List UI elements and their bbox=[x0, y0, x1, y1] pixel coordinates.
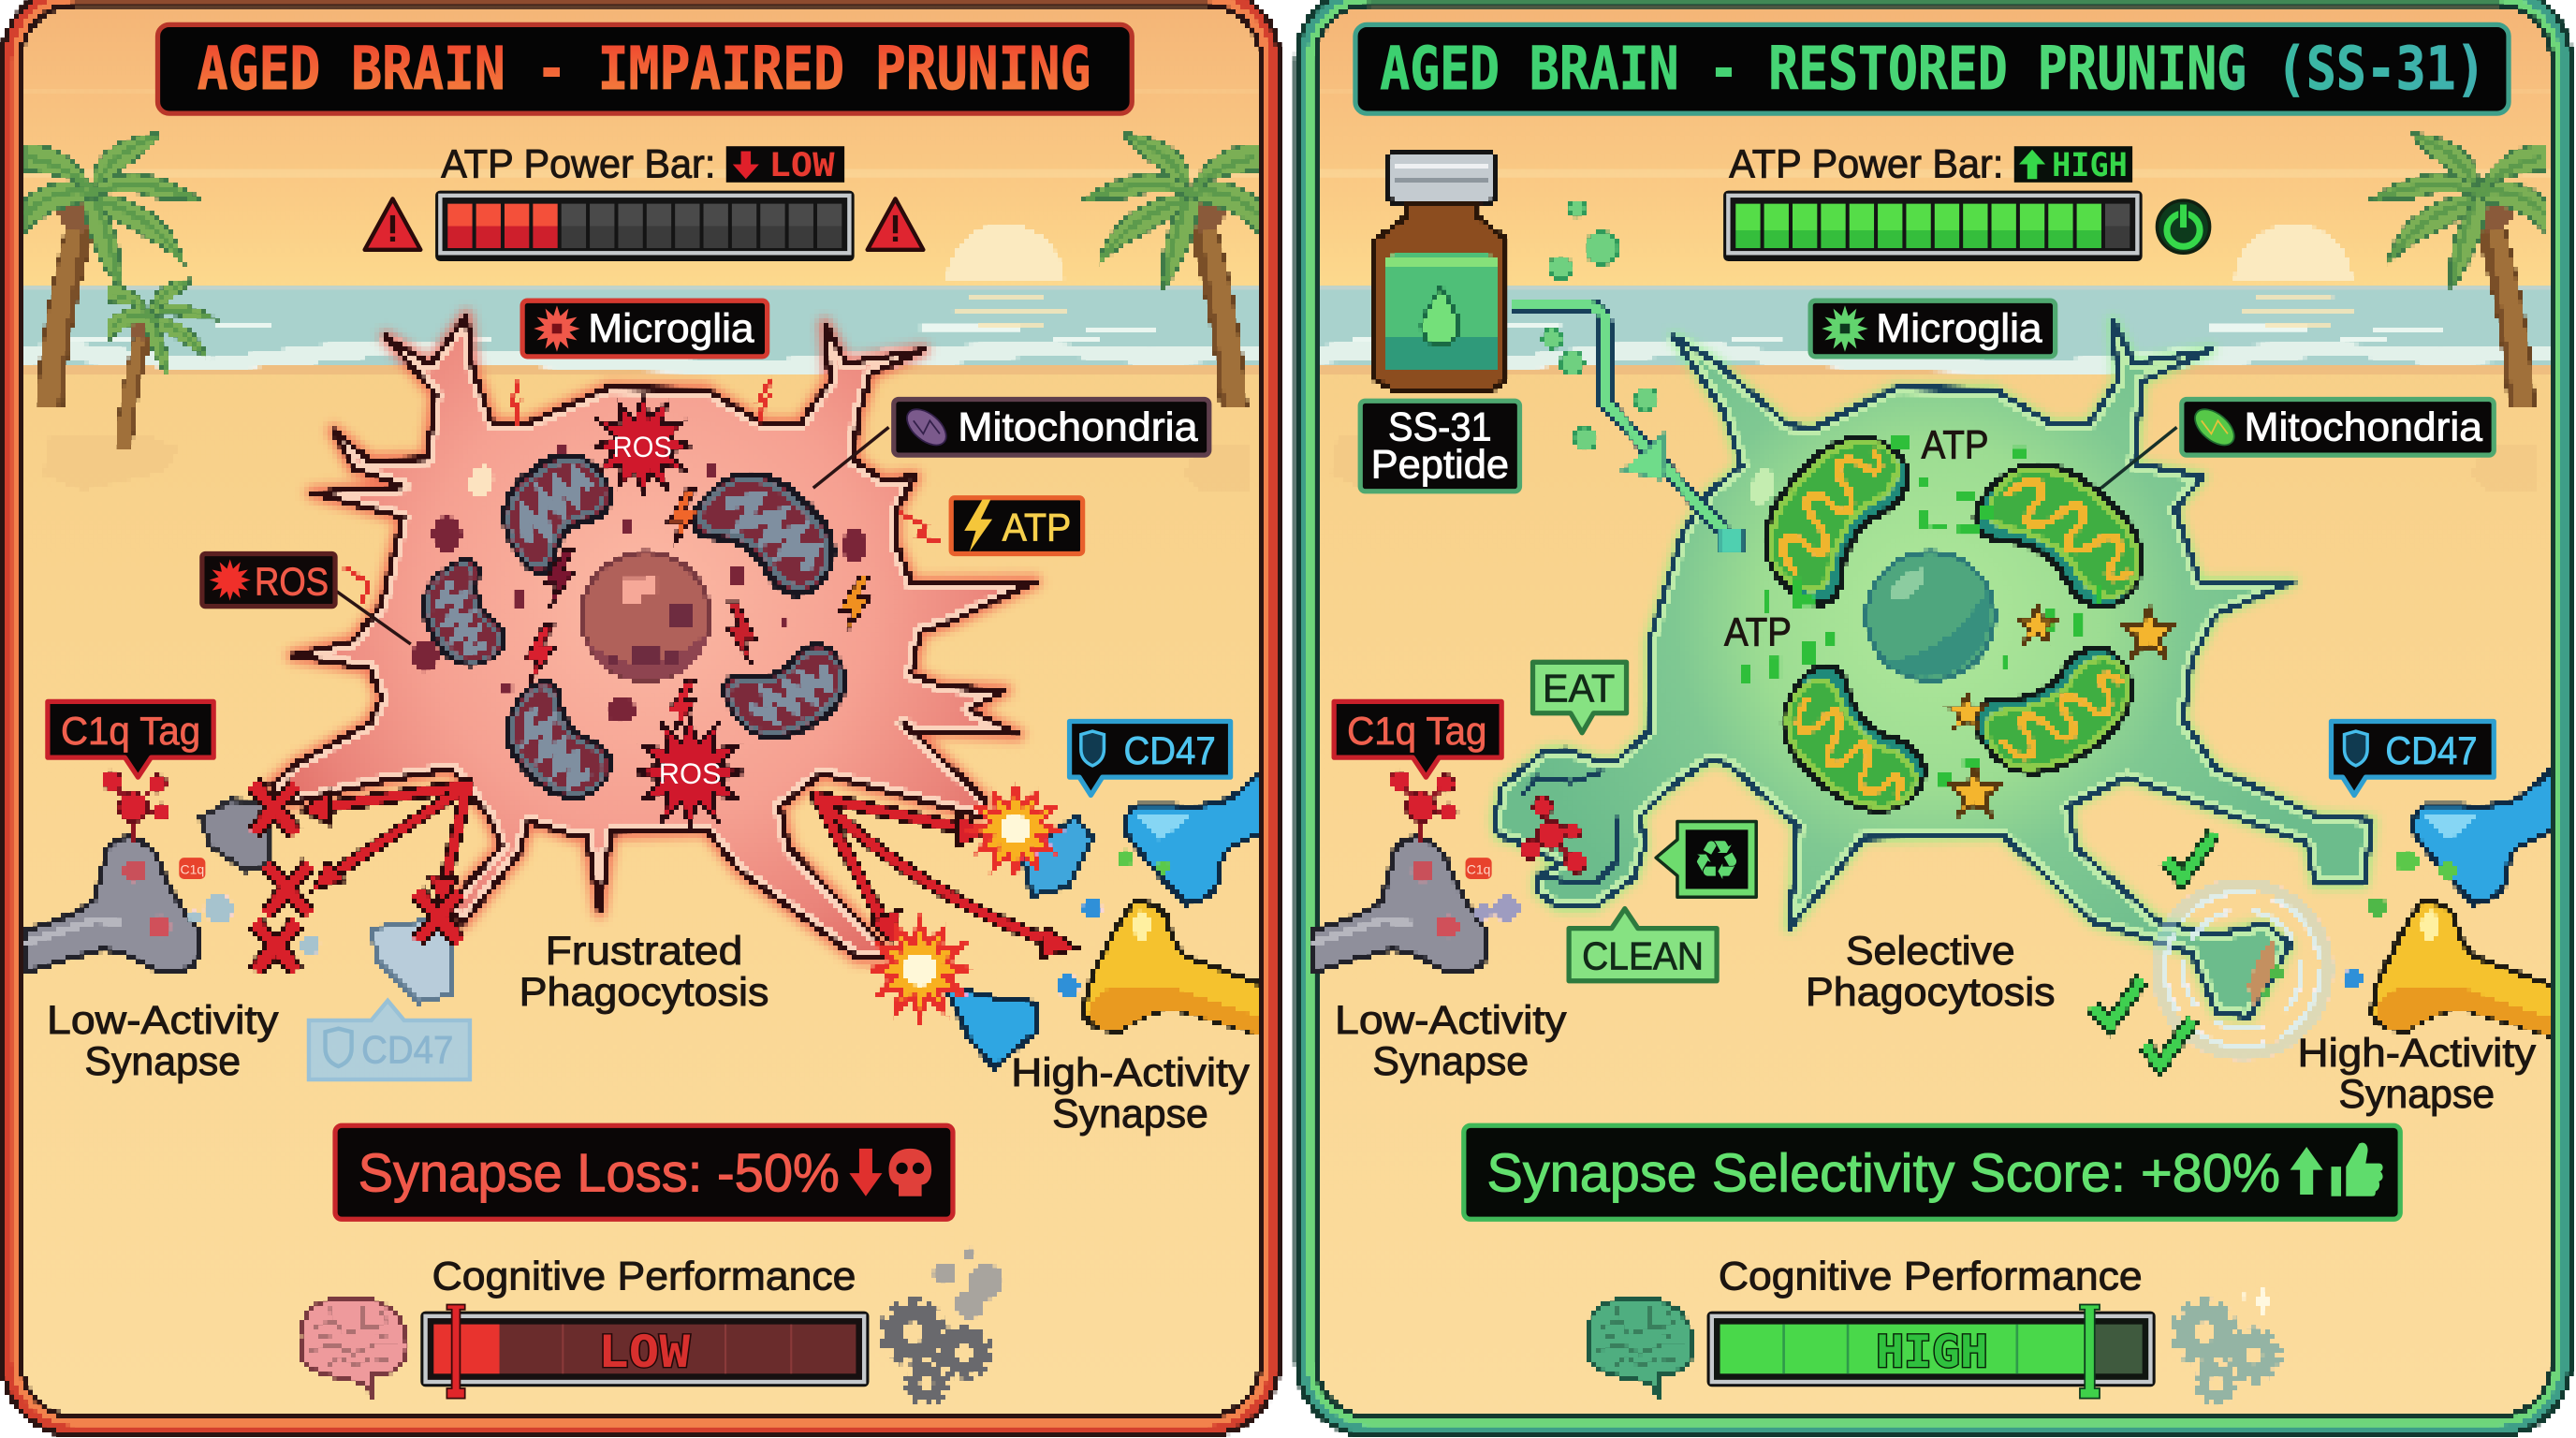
ATP power bar heading: ATP Power Bar: bbox=[441, 142, 715, 187]
icon: brain bbox=[1588, 1299, 1693, 1397]
result: synapse loss: Synapse Loss: -50% bbox=[359, 1143, 840, 1203]
label: mitochondria: Mitochondria bbox=[2244, 404, 2482, 449]
label: microglia bbox=[522, 301, 768, 357]
label layer bbox=[1334, 24, 2537, 1399]
cognitive bar low: LOW bbox=[598, 1327, 691, 1378]
mitochondria healthy bbox=[1735, 414, 2165, 830]
label: C1q tag bbox=[1334, 701, 1501, 777]
title banner bbox=[157, 24, 1132, 113]
ATP power bar bbox=[1723, 191, 2143, 261]
text: selective phagocytosis: Phagocytosis bbox=[1806, 970, 2056, 1015]
ATP power bar heading: HIGH bbox=[2052, 146, 2128, 184]
ROS text bottom: ROS bbox=[659, 756, 721, 790]
check marks bbox=[2093, 833, 2215, 1064]
label: faded CD47 bbox=[309, 1001, 470, 1079]
delivery tube arrow bbox=[1512, 305, 1745, 552]
cognitive bar low bbox=[420, 1305, 869, 1399]
explosion lower bbox=[863, 913, 976, 1026]
ATP particles bbox=[1741, 435, 2103, 788]
bubbles bbox=[1543, 200, 1658, 450]
text: low activity synapse: Low-Activity bbox=[47, 998, 279, 1043]
label: SS-31 peptide: SS-31 bbox=[1388, 404, 1492, 449]
icon: gears with sparkles bbox=[2175, 1286, 2278, 1402]
small damaged organelles bbox=[413, 444, 866, 723]
text: high activity synapse: Synapse bbox=[2338, 1072, 2495, 1117]
text: high activity synapse: Synapse bbox=[1052, 1092, 1208, 1137]
small blue synapse bbox=[944, 986, 1036, 1068]
peptide vial bbox=[1375, 151, 1506, 389]
label: CD47 bbox=[2331, 721, 2494, 795]
label: ROS: ROS bbox=[255, 559, 329, 603]
blue synapse right bbox=[2395, 759, 2561, 903]
title banner: AGED BRAIN - IMPAIRED PRUNING bbox=[198, 34, 1090, 103]
beach background bbox=[0, 0, 1298, 1438]
engulfed C1q molecule bbox=[1521, 797, 1587, 873]
icon: warning right bbox=[868, 198, 923, 250]
label: mitochondria: Mitochondria bbox=[958, 404, 1198, 449]
ROS burst bottom bbox=[636, 718, 744, 827]
icon: recycling: ♻ bbox=[1692, 829, 1741, 892]
label: CD47 bbox=[1070, 721, 1231, 795]
X marks bbox=[253, 784, 460, 971]
icon: gears with smoke bbox=[885, 1247, 1003, 1402]
label: mitochondria bbox=[894, 399, 1209, 455]
small C1q tag bbox=[179, 858, 205, 879]
label: ATP: ATP bbox=[1003, 505, 1071, 549]
text: high activity synapse: High-Activity bbox=[1011, 1050, 1250, 1095]
text: low activity synapse: Low-Activity bbox=[1335, 998, 1567, 1043]
label: microglia: Microglia bbox=[588, 306, 754, 351]
text: frustrated phagocytosis: Phagocytosis bbox=[520, 970, 768, 1015]
lightning bolts bbox=[524, 489, 871, 733]
label: CLEAN: CLEAN bbox=[1582, 934, 1704, 978]
ATP power bar heading: ATP Power Bar: bbox=[1729, 142, 2003, 187]
cognitive bar high: HIGH bbox=[1876, 1327, 1988, 1378]
blue synapse right bbox=[1119, 772, 1259, 908]
label: ROS bbox=[202, 553, 335, 607]
label: EAT bbox=[1533, 662, 1627, 733]
icon: warning left bbox=[365, 198, 420, 250]
icon: palm tree right bbox=[2369, 133, 2546, 407]
broken synapse fragment bbox=[200, 800, 271, 871]
result: selectivity score: Synapse Selectivity Score: +80% bbox=[1486, 1143, 2280, 1203]
yellow synapse right bbox=[2343, 897, 2561, 1038]
ATP power bar heading: LOW bbox=[768, 146, 836, 184]
result: selectivity score bbox=[1464, 1125, 2400, 1219]
text: selective phagocytosis: Selective bbox=[1846, 929, 2015, 974]
label: mitochondria bbox=[2182, 399, 2494, 455]
icon: small palm tree left bbox=[109, 279, 218, 448]
pruning arrows left bbox=[300, 785, 468, 905]
artwork layer: beach, cell and synapses bbox=[1288, 0, 2576, 1438]
label: SS-31 peptide bbox=[1360, 401, 1519, 492]
engulfed synapse detail bbox=[2247, 940, 2284, 1005]
leader line bbox=[2101, 427, 2177, 488]
label: CLEAN bbox=[1569, 909, 1717, 981]
yellow synapse right bbox=[1057, 899, 1273, 1038]
label: microglia bbox=[1810, 301, 2056, 357]
label: C1q tag: C1q Tag bbox=[1347, 709, 1486, 753]
phagocytic cup inner lines bbox=[1521, 770, 1617, 882]
artwork layer: beach, cell and synapses bbox=[0, 0, 1298, 1438]
icon: recycling bbox=[1656, 822, 1756, 897]
nucleus bbox=[581, 552, 710, 681]
label: C1q tag bbox=[48, 701, 213, 777]
low activity synapse bbox=[1312, 770, 1519, 973]
panel frame bbox=[3, 0, 1279, 1435]
broken blue synapse piece bbox=[1022, 816, 1092, 896]
ROS text top: ROS bbox=[613, 430, 672, 463]
panel frame bbox=[1297, 0, 2570, 1435]
label: C1q tag: C1q Tag bbox=[61, 709, 200, 753]
label: CD47: CD47 bbox=[1123, 728, 1216, 772]
microglia cell, impaired bbox=[271, 315, 1035, 958]
text: cognitive performance: Cognitive Performance bbox=[1719, 1255, 2143, 1299]
label: CD47: CD47 bbox=[2385, 728, 2478, 772]
icon: brain bbox=[302, 1299, 407, 1397]
small C1q tag: C1q bbox=[180, 862, 204, 877]
label layer bbox=[47, 24, 1250, 1399]
ROS burst top bbox=[593, 396, 692, 494]
beach background bbox=[1288, 0, 2576, 1438]
nucleus bbox=[1866, 552, 1995, 681]
text: cognitive performance: Cognitive Performance bbox=[432, 1255, 856, 1299]
label: SS-31 peptide: Peptide bbox=[1371, 443, 1509, 488]
text: ATP lower: ATP bbox=[1724, 610, 1792, 655]
panel: aged brain restored pruning bbox=[1288, 0, 2576, 1438]
icon: power bbox=[2157, 200, 2210, 253]
pruning arrows right bbox=[816, 797, 1077, 958]
text: ATP upper: ATP bbox=[1922, 423, 1989, 468]
icon: large palm tree left bbox=[24, 133, 202, 407]
icon: palm tree right bbox=[1081, 133, 1258, 407]
cognitive bar high bbox=[1707, 1305, 2156, 1399]
label: microglia: Microglia bbox=[1876, 306, 2042, 351]
small C1q tag bbox=[1466, 858, 1492, 879]
text: frustrated phagocytosis: Frustrated bbox=[546, 929, 742, 974]
small C1q tag: C1q bbox=[1467, 862, 1490, 877]
ATP power bar bbox=[435, 191, 855, 261]
label: EAT: EAT bbox=[1543, 666, 1615, 710]
result: synapse loss bbox=[335, 1125, 953, 1219]
mitochondria damaged bbox=[404, 440, 861, 814]
microglia cell, healthy bbox=[1495, 320, 2372, 1017]
low activity synapse bbox=[24, 770, 233, 973]
label: faded CD47: CD47 bbox=[361, 1028, 453, 1072]
explosion upper bbox=[963, 778, 1067, 882]
faded synapse fragment bbox=[372, 920, 452, 1003]
stars bbox=[1948, 605, 2174, 814]
text: low activity synapse: Synapse bbox=[1372, 1039, 1529, 1084]
label: ATP bbox=[951, 498, 1083, 553]
swirl around engulfed synapse bbox=[2157, 884, 2328, 1055]
leader lines bbox=[337, 427, 889, 644]
text: high activity synapse: High-Activity bbox=[2298, 1031, 2537, 1076]
panel: aged brain impaired pruning bbox=[0, 0, 1298, 1438]
text: low activity synapse: Synapse bbox=[84, 1039, 241, 1084]
